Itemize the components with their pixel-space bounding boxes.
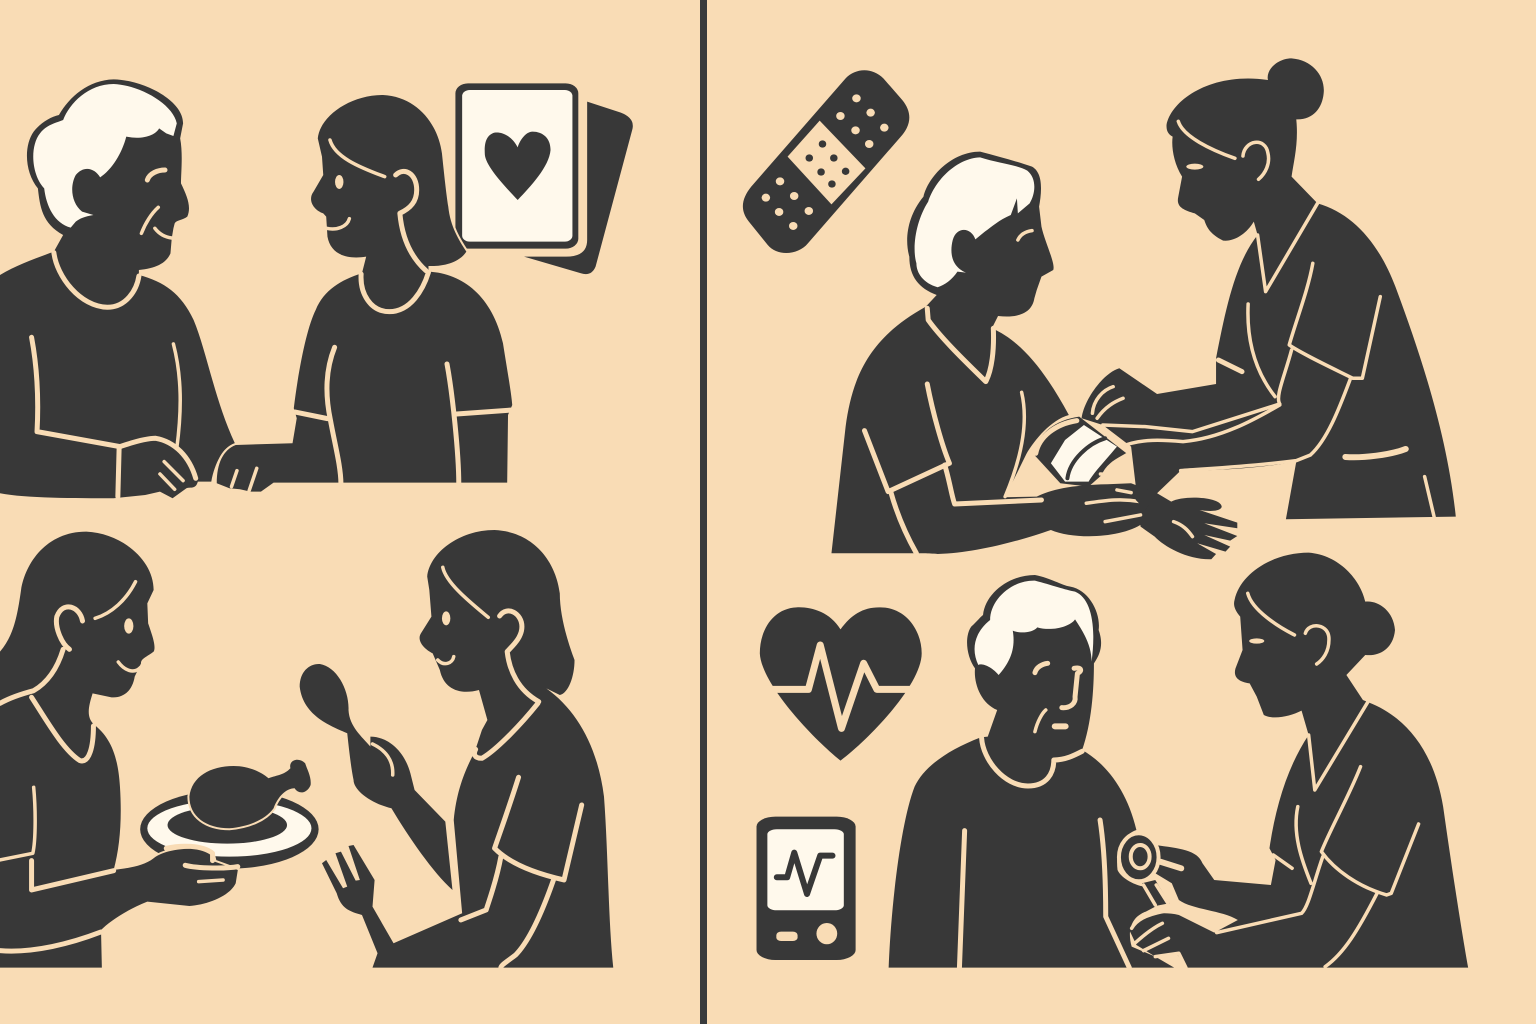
icon: stethoscope chest piece <box>1119 833 1169 906</box>
woman serving food <box>0 532 238 968</box>
elderly patient <box>889 575 1174 968</box>
woman holding spoon and fork <box>300 530 613 968</box>
woman visitor <box>217 95 513 492</box>
panel: wound dressing <box>743 58 1456 559</box>
panel: sharing a meal <box>0 530 613 968</box>
vertical divider <box>700 0 707 1024</box>
spoon and raised arm <box>300 664 452 890</box>
bandaged arm <box>1034 417 1192 537</box>
icon: heart with pulse line <box>760 607 922 761</box>
panel: companionship with playing cards <box>0 79 633 498</box>
panel: vital signs check <box>757 553 1468 968</box>
nurse <box>1082 58 1456 559</box>
seated patient <box>831 152 1143 554</box>
icon: plate with chicken <box>140 760 319 869</box>
icon: playing cards <box>455 83 633 274</box>
icon: handheld monitor <box>757 817 856 960</box>
elderly man <box>0 79 235 498</box>
icon: adhesive bandage <box>743 70 909 253</box>
nurse with stethoscope <box>1129 553 1468 968</box>
